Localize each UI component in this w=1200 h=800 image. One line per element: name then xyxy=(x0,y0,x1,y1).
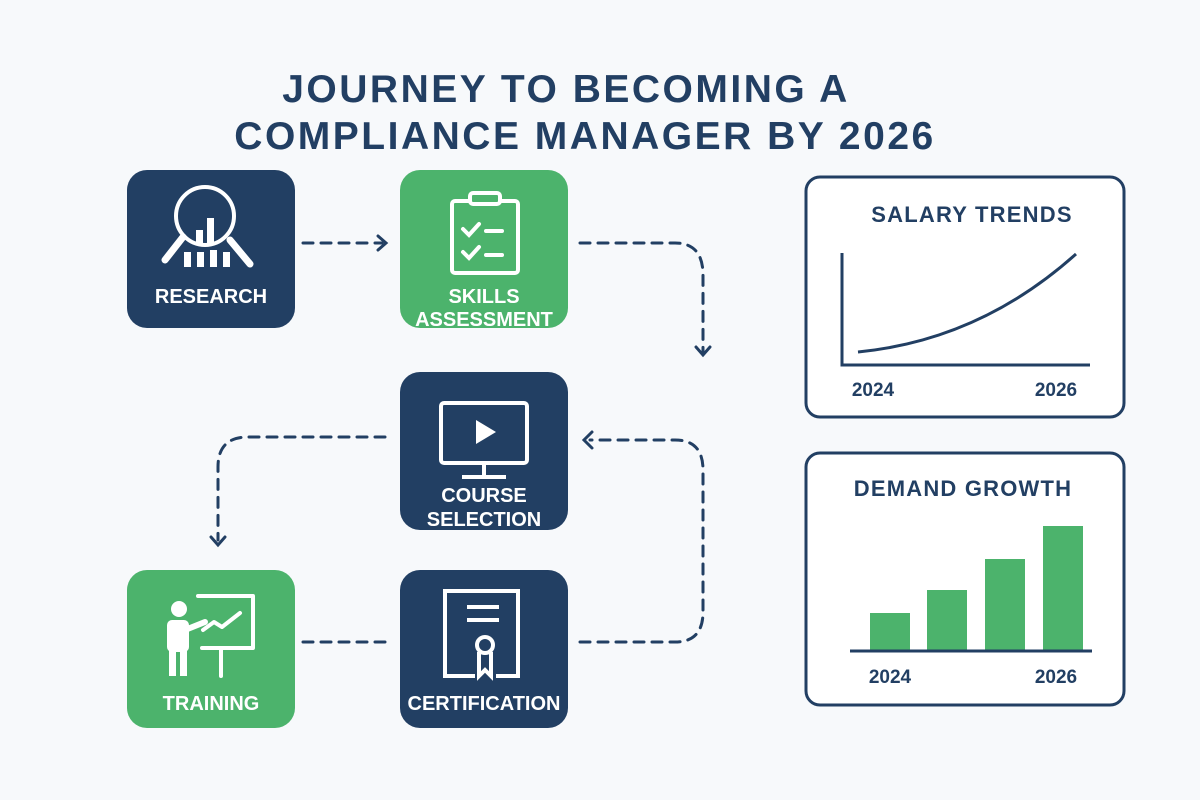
arrowheads xyxy=(211,236,710,545)
icon: presenter at board xyxy=(198,596,253,676)
panel: salary trends: 2026 xyxy=(1035,380,1077,401)
title xyxy=(234,68,936,158)
panel: demand growth: 2024 xyxy=(869,667,912,688)
step: course selection xyxy=(400,372,568,531)
panel: demand growth: 2026 xyxy=(1035,667,1077,688)
icon: certificate xyxy=(445,591,518,676)
step: training xyxy=(127,570,295,728)
title: COMPLIANCE MANAGER BY 2026 xyxy=(234,115,936,158)
panel: demand growth: DEMAND GROWTH xyxy=(854,476,1072,501)
title: JOURNEY TO BECOMING A xyxy=(282,68,850,111)
step: skills assessment: ASSESSMENT xyxy=(415,309,553,331)
icon: magnifier with chart xyxy=(165,187,250,264)
step: course selection: SELECTION xyxy=(427,509,541,531)
arrows xyxy=(218,243,703,642)
step: certification: CERTIFICATION xyxy=(408,693,560,715)
step: skills assessment: SKILLS xyxy=(448,286,520,308)
step: course selection: COURSE xyxy=(441,485,527,507)
line chart xyxy=(842,253,1090,365)
step: certification xyxy=(400,570,568,728)
panel: salary trends: 2024 xyxy=(852,380,895,401)
step: skills assessment xyxy=(400,170,568,331)
step: research: RESEARCH xyxy=(155,286,267,308)
panel: salary trends: SALARY TRENDS xyxy=(871,202,1073,227)
bar chart xyxy=(870,526,1083,651)
step: training: TRAINING xyxy=(163,693,259,715)
step: research xyxy=(127,170,295,328)
panel: demand growth xyxy=(806,453,1124,705)
icon: monitor with play xyxy=(441,403,527,477)
panel: salary trends xyxy=(806,177,1124,417)
icon: clipboard xyxy=(452,193,518,273)
